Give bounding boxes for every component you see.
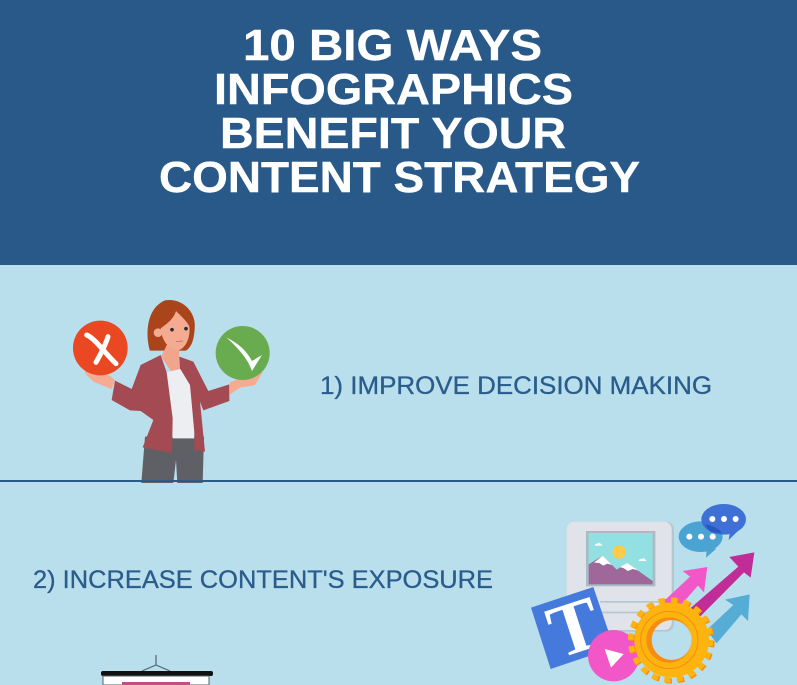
title: 10 BIG WAYS	[243, 21, 542, 70]
play button	[588, 630, 639, 681]
divider	[0, 480, 797, 482]
icon: hanging presentation board (cropped)	[101, 655, 213, 685]
title: BENEFIT YOUR	[220, 109, 566, 158]
title: CONTENT STRATEGY	[159, 153, 640, 202]
left hand	[82, 364, 115, 389]
blouse	[166, 369, 194, 438]
blazer	[112, 355, 173, 453]
red ball with cross	[73, 321, 128, 375]
picture	[586, 531, 655, 586]
trousers	[141, 437, 204, 483]
right hand	[230, 368, 262, 394]
title	[159, 21, 640, 202]
text tile: T	[538, 581, 611, 675]
document card	[567, 522, 674, 632]
speech bubbles	[679, 504, 746, 558]
green ball with check	[216, 326, 270, 380]
icon: woman weighing a cross and a check	[73, 300, 270, 483]
arrows	[663, 552, 754, 643]
step 2 label: 2) INCREASE CONTENT'S EXPOSURE	[33, 566, 493, 594]
hair	[148, 300, 195, 351]
gear	[631, 600, 712, 681]
face	[161, 311, 190, 350]
title: INFOGRAPHICS	[214, 65, 573, 114]
header banner	[0, 0, 797, 265]
step 1 label: 1) IMPROVE DECISION MAKING	[320, 372, 712, 400]
icon: content media cluster	[531, 504, 754, 681]
neck	[161, 345, 183, 372]
